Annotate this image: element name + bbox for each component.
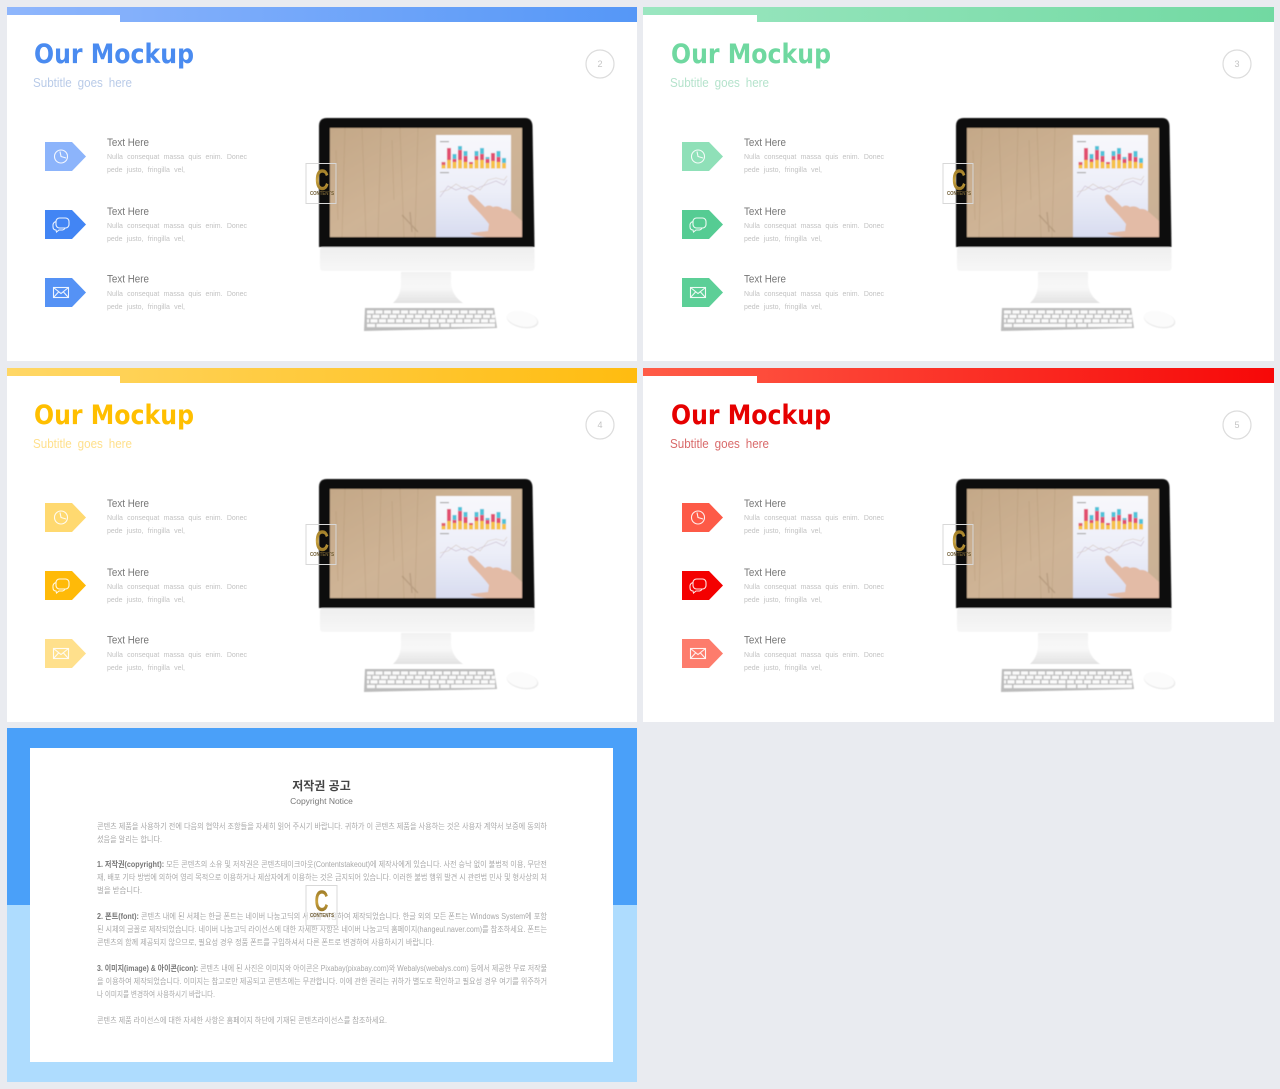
list item 1: pede justo, fringilla vel, [107, 526, 185, 535]
list item 3: Text Here [744, 274, 786, 286]
list item 2: pede justo, fringilla vel, [744, 595, 822, 604]
list item 1: Text Here [744, 137, 786, 149]
list item 2 [682, 206, 884, 243]
list item 3: Text Here [107, 274, 149, 286]
section 3 image and icon: 나 이미지를 변경하여 사용하시기 바랍니다. [97, 989, 215, 999]
watermark [306, 524, 336, 564]
list item 2: Nulla consequat massa quis enim. Donec [744, 221, 884, 230]
header bar [643, 368, 1274, 383]
subtitle: Subtitle goes here [670, 436, 769, 451]
list item 1 [682, 498, 884, 535]
list item 1: Text Here [107, 498, 149, 510]
watermark: CONTENTS [310, 191, 335, 197]
list item 2 [45, 206, 247, 243]
list item 2: Nulla consequat massa quis enim. Donec [107, 582, 247, 591]
monitor mockup [956, 118, 1177, 331]
header bar [643, 7, 1274, 22]
list item 3: pede justo, fringilla vel, [744, 302, 822, 311]
list item 2: pede justo, fringilla vel, [744, 234, 822, 243]
section 1 copyright [97, 859, 547, 895]
title: Our Mockup [671, 400, 831, 431]
section 1 copyright: 1. 저작권(copyright): 모든 콘텐츠의 소유 및 저작권은 콘텐츠테이크아웃(Contentstakeout)에 제작사에게 있습니다. 사전 승낙 없이 불법적 이용, 무단전 [97, 859, 547, 869]
watermark: CONTENTS [310, 913, 335, 919]
list item 2: Text Here [107, 567, 149, 579]
panel: blue mockup slide [7, 7, 637, 361]
panel: copyright notice [7, 728, 637, 1082]
list item 2: Nulla consequat massa quis enim. Donec [107, 221, 247, 230]
subtitle: Subtitle goes here [670, 75, 769, 90]
title: Our Mockup [671, 39, 831, 70]
page number [586, 411, 614, 439]
list item 2: Text Here [744, 567, 786, 579]
list item 2 [45, 567, 247, 604]
section 3 image and icon: 을 이용하여 제작되었습니다. 이미지는 참고로만 제공되고 콘텐츠에는 무관합니다. 이에 관한 권리는 귀하가 별도로 확인하고 필요성 경우 여기를 위주하거 [97, 976, 547, 986]
copyright heading: 저작권 공고 [292, 778, 351, 793]
closing note: 콘텐츠 제품 라이선스에 대한 자세한 사항은 홈페이지 하단에 기재된 콘텐츠라이선스를 참조하세요. [97, 1015, 387, 1025]
list item 2: Text Here [107, 206, 149, 218]
watermark: C [952, 525, 966, 558]
list item 3: Nulla consequat massa quis enim. Donec [744, 650, 884, 659]
list item 1: Text Here [107, 137, 149, 149]
watermark [306, 885, 337, 926]
section 3 image and icon [97, 963, 547, 999]
list item 1: Nulla consequat massa quis enim. Donec [744, 513, 884, 522]
list item 3 [682, 274, 884, 311]
list item 1 [45, 498, 247, 535]
list item 3: Nulla consequat massa quis enim. Donec [107, 289, 247, 298]
watermark: C [315, 164, 329, 197]
list item 2: Text Here [744, 206, 786, 218]
list item 1: Nulla consequat massa quis enim. Donec [107, 152, 247, 161]
list item 1: Nulla consequat massa quis enim. Donec [107, 513, 247, 522]
section 3 image and icon: 3. 이미지(image) & 아이콘(icon): 콘텐츠 내에 된 사진은 이미지와 아이콘은 Pixabay(pixabay.com)와 Webalys(webalys.com) 등에서 제공한 무료 저작물 [97, 963, 547, 973]
list item 3 [682, 634, 884, 672]
list item 3: pede justo, fringilla vel, [744, 663, 822, 672]
subtitle: Subtitle goes here [33, 75, 132, 90]
page number: 2 [597, 59, 603, 69]
list item 3: pede justo, fringilla vel, [107, 663, 185, 672]
notice intro: 셨음을 알리는 합니다. [97, 834, 162, 844]
monitor mockup [956, 479, 1177, 692]
subtitle: Subtitle goes here [33, 436, 132, 451]
page number [1223, 50, 1251, 78]
list item 1: pede justo, fringilla vel, [744, 526, 822, 535]
list item 1: Text Here [744, 498, 786, 510]
list item 3 [45, 634, 247, 672]
list item 1: pede justo, fringilla vel, [744, 165, 822, 174]
section 2 font: 콘텐츠의 함께 제공되지 않으므로, 필요성 경우 정품 폰트를 구입하셔서 다른 폰트로 변경하여 사용하시기 바랍니다. [97, 937, 434, 947]
watermark: CONTENTS [947, 191, 972, 197]
section 1 copyright: 벌을 받습니다. [97, 885, 142, 895]
list item 1 [682, 137, 884, 174]
page number: 4 [597, 420, 603, 430]
list item 3: Nulla consequat massa quis enim. Donec [744, 289, 884, 298]
header bar [7, 368, 637, 383]
notice intro: 콘텐츠 제품을 사용하기 전에 다음의 협약서 조항들을 자세히 읽어 주시기 바랍니다. 귀하가 이 콘텐츠 제품을 사용하는 것은 사용자 계약서 보증에 동의하 [97, 821, 548, 831]
title: Our Mockup [34, 400, 194, 431]
panel: yellow mockup slide [7, 368, 637, 722]
section 2 font [97, 911, 548, 947]
watermark [943, 524, 973, 564]
page number: 5 [1234, 420, 1240, 430]
page number [586, 50, 614, 78]
list item 3: pede justo, fringilla vel, [107, 302, 185, 311]
watermark: C [952, 164, 966, 197]
section 1 copyright: 재, 배포 기타 방법에 의하여 영리 목적으로 이용하거나 제삼자에게 이용하는 것은 금지되어 있습니다. 이러한 불법 행위 발견 시 관련법 민사 및 형사상의 처 [97, 872, 547, 882]
list item 2: Nulla consequat massa quis enim. Donec [744, 582, 884, 591]
panel: red mockup slide [643, 368, 1274, 722]
watermark: C [314, 885, 328, 918]
list item 2: pede justo, fringilla vel, [107, 234, 185, 243]
copyright subheading: Copyright Notice [290, 796, 353, 806]
page number: 3 [1234, 59, 1240, 69]
list item 1: pede justo, fringilla vel, [107, 165, 185, 174]
watermark: CONTENTS [947, 552, 972, 558]
list item 3: Text Here [744, 634, 786, 646]
monitor mockup [319, 118, 540, 331]
section 2 font: 된 시체의 글꼴로 제작되었습니다. 네이버 나눔고딕 라이선스에 대한 자세한 사항은 네이버 나눔고딕 홈페이지(hangeul.naver.com)를 참조하세요. 폰트는 [97, 924, 547, 934]
list item 3 [45, 274, 247, 311]
watermark: C [315, 525, 329, 558]
list item 1: Nulla consequat massa quis enim. Donec [744, 152, 884, 161]
section 2 font: 2. 폰트(font): 콘텐츠 내에 된 서체는 한글 폰트는 네이버 나눔고딕의 서체를 사용하여 제작되었습니다. 한글 외의 모든 폰트는 Windows System에 포함 [97, 911, 548, 921]
notice intro [97, 821, 548, 844]
watermark [943, 164, 973, 204]
page number [1223, 411, 1251, 439]
list item 1 [45, 137, 247, 174]
header bar [7, 7, 637, 22]
monitor mockup [319, 479, 540, 692]
list item 2 [682, 567, 884, 604]
list item 2: pede justo, fringilla vel, [107, 595, 185, 604]
panel: green mockup slide [643, 7, 1274, 361]
watermark: CONTENTS [310, 552, 335, 558]
list item 3: Nulla consequat massa quis enim. Donec [107, 650, 247, 659]
title: Our Mockup [34, 39, 194, 70]
list item 3: Text Here [107, 634, 149, 646]
watermark [306, 164, 336, 204]
